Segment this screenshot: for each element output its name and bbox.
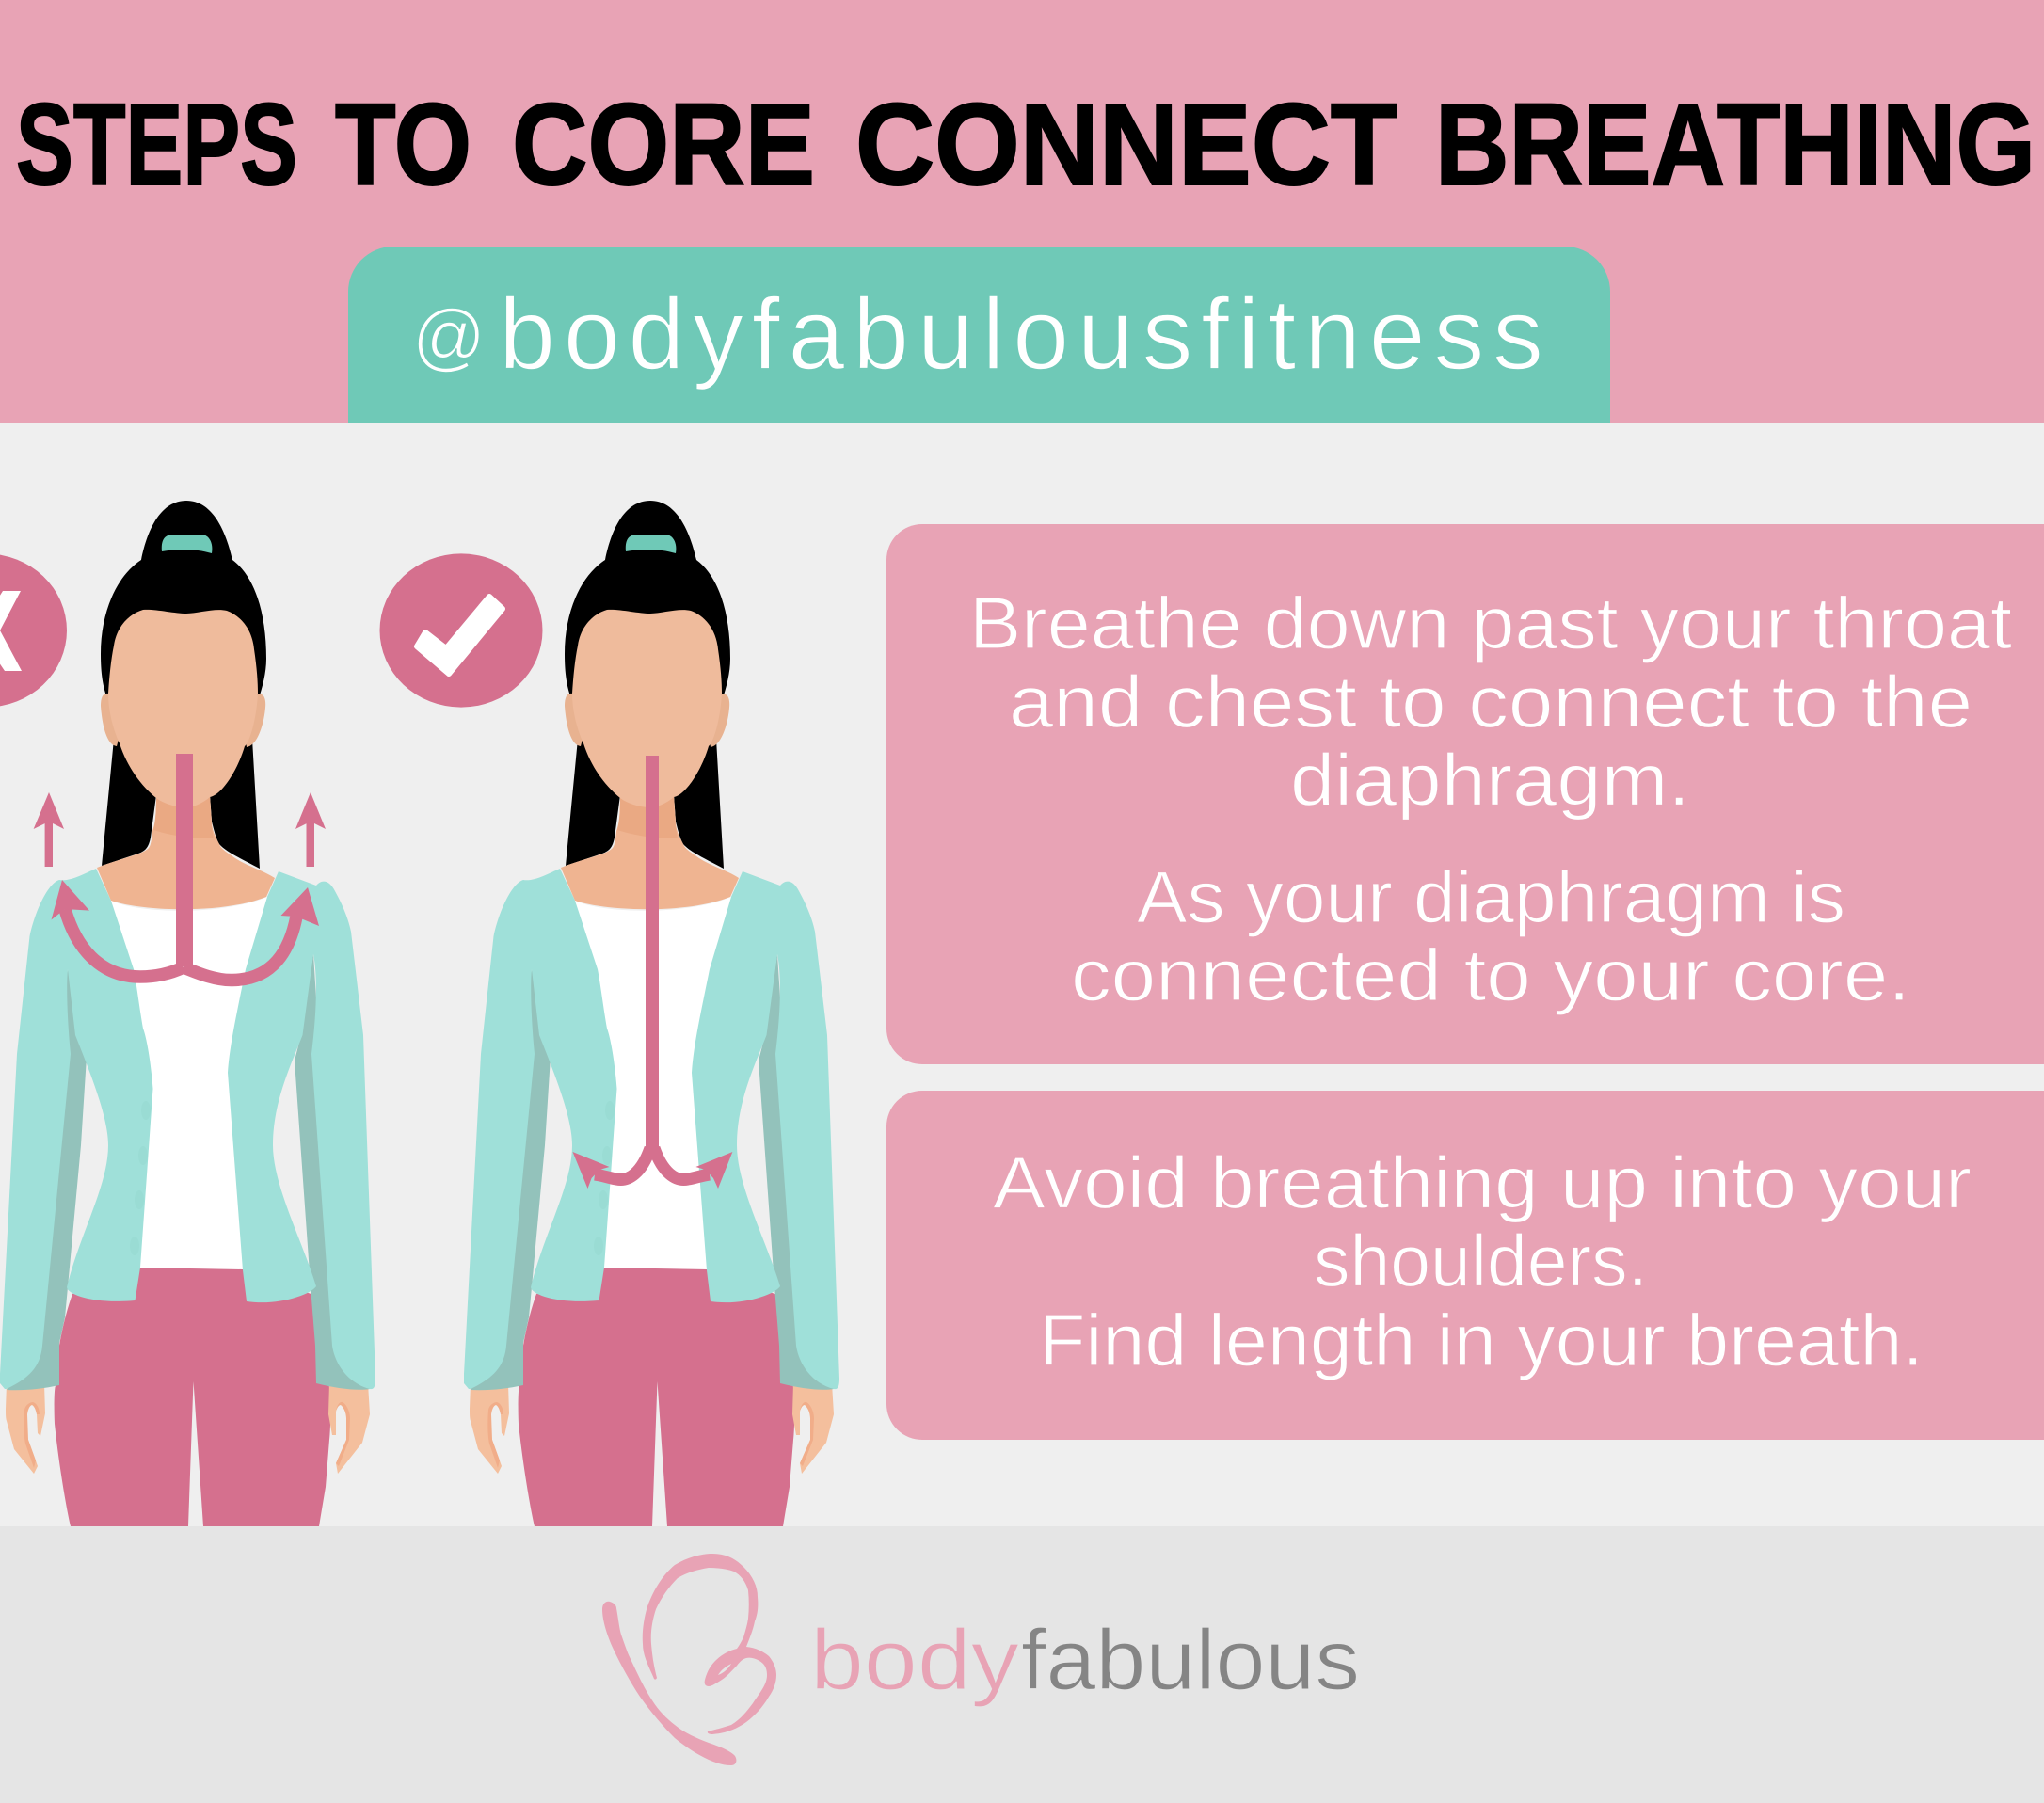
hair [565, 501, 730, 869]
neck shadow [153, 795, 214, 838]
arrow: breath down to diaphragm [572, 756, 732, 1189]
logo wordmark: body [810, 1613, 1020, 1708]
title: STEPS [16, 81, 297, 210]
arrow: right shoulder up [295, 792, 326, 867]
logo wordmark [810, 1613, 1360, 1708]
jacket right [692, 871, 839, 1389]
icon: check badge [380, 553, 542, 708]
hands [470, 1383, 834, 1474]
logo [602, 1554, 1360, 1765]
face [108, 610, 258, 807]
shirt [575, 897, 746, 1269]
ears [101, 694, 265, 747]
panel: avoid shoulders [886, 1091, 2044, 1440]
panel text: and chest to connect to the [1009, 661, 1972, 743]
figure: incorrect breathing [0, 501, 375, 1526]
header band [0, 0, 2044, 423]
icon: cross badge [0, 553, 67, 708]
footer band [0, 1526, 2044, 1803]
title: TO [335, 81, 471, 210]
face [572, 610, 722, 807]
ears [565, 694, 729, 747]
handle text: bodyfabulousfitness [499, 277, 1543, 391]
handle tab [348, 247, 1610, 423]
figure: correct breathing [464, 501, 839, 1526]
panel text: shoulders. [1314, 1220, 1648, 1302]
neck [97, 795, 275, 909]
hands [6, 1383, 370, 1474]
jacket left [464, 869, 617, 1389]
hair tie [162, 535, 212, 553]
title: CONNECT [855, 81, 1397, 210]
jacket left [0, 869, 152, 1389]
panel text: connected to your core. [1071, 933, 1910, 1016]
jacket buttons [130, 1101, 151, 1255]
arrow: left shoulder up [34, 792, 64, 867]
panel text: Avoid breathing up into your [993, 1141, 1972, 1223]
title: CORE [512, 81, 815, 210]
shirt [111, 897, 282, 1269]
title [16, 81, 2036, 210]
panel text [969, 582, 2012, 1016]
jacket buttons [594, 1101, 615, 1255]
handle text: @ [412, 295, 486, 378]
pants [519, 1268, 794, 1526]
panel: breathe down [886, 524, 2044, 1064]
hair [101, 501, 266, 869]
logo wordmark: fabulous [1021, 1613, 1360, 1708]
panel text: Find length in your breath. [1039, 1299, 1924, 1381]
jacket shadow [7, 954, 370, 1390]
panel text [993, 1141, 1972, 1381]
jacket shadow [471, 954, 834, 1390]
panel text: Breathe down past your throat [969, 582, 2012, 664]
neck shadow [617, 795, 678, 838]
arrow: breath into shoulders [51, 754, 319, 981]
jacket right [228, 871, 375, 1389]
logo mark [602, 1554, 776, 1765]
panel text: diaphragm. [1290, 738, 1690, 821]
panel text: As your diaphragm is [1137, 855, 1845, 938]
pants [55, 1268, 330, 1526]
hair tie [626, 535, 676, 553]
neck [561, 795, 739, 909]
